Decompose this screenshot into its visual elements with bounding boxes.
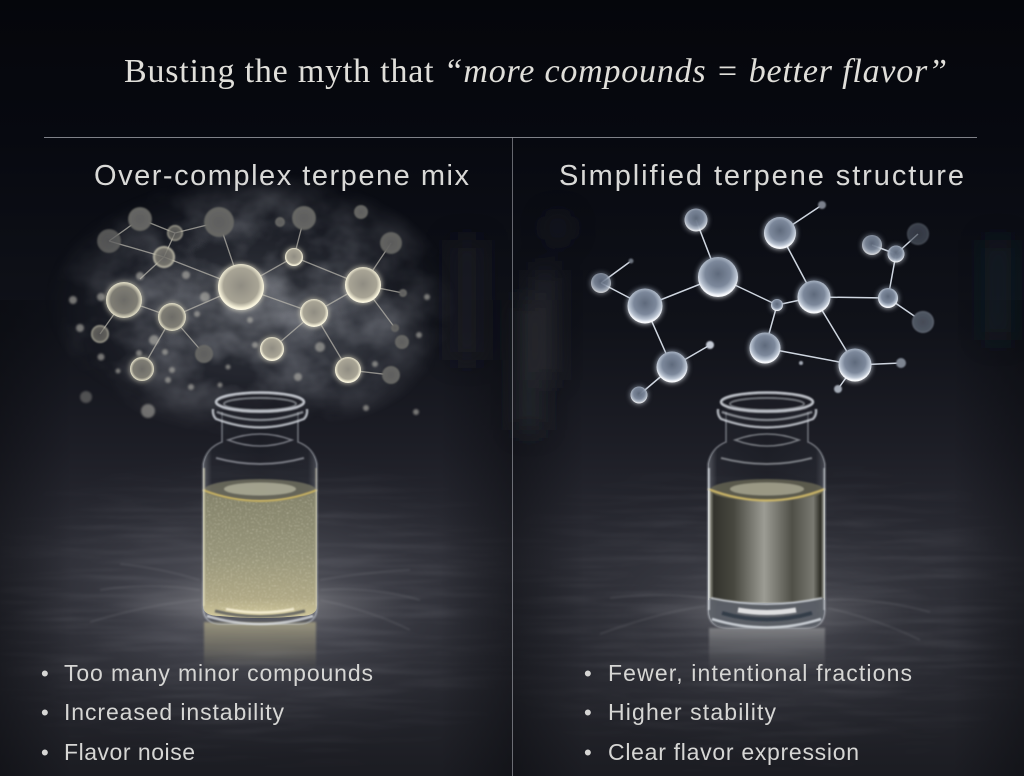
particles in liquid (206, 494, 314, 612)
panel: over-complex terpene mix (68, 180, 440, 422)
bullet: clear flavor expression: Clear flavor expression (608, 739, 859, 765)
liquid surface (708, 479, 825, 501)
bottle: clear liquid vial (708, 392, 825, 676)
glass highlights (708, 412, 825, 628)
bullet: increased instability: • (41, 700, 49, 725)
bullet: flavor noise: • (41, 740, 49, 765)
glass highlights (203, 412, 317, 624)
bullet: higher stability: Higher stability (608, 699, 776, 725)
heading: right panel: Simplified terpene structure (559, 160, 964, 192)
bullet: flavor noise: Flavor noise (64, 739, 195, 765)
bottle: cloudy liquid vial (203, 392, 317, 672)
liquid surface (203, 479, 317, 501)
bullet list: right panel (584, 660, 912, 765)
title: Busting the myth that “more compounds = better flavor” (124, 53, 947, 90)
glowing atoms (106, 248, 381, 383)
heading: left panel: Over-complex terpene mix (94, 160, 470, 192)
screw neck rim (213, 392, 307, 428)
liquid (203, 490, 317, 618)
bullet: too many minor compounds: • (41, 661, 49, 686)
bullet: fewer, intentional fractions: Fewer, intentional fractions (608, 660, 912, 686)
liquid (708, 490, 825, 604)
table reflection (709, 628, 825, 676)
smoke cloud (68, 180, 440, 422)
divider lines (44, 137, 977, 776)
table reflection (204, 622, 316, 672)
bullet list: left panel (41, 660, 373, 765)
bullet: increased instability: Increased instability (64, 699, 284, 725)
screw neck rim (718, 392, 816, 428)
molecule atoms (91, 205, 409, 384)
glass body (203, 412, 317, 624)
floating particles (69, 271, 430, 418)
background (0, 210, 1024, 776)
bullet: fewer, intentional fractions: • (584, 661, 592, 686)
glowing atoms (591, 208, 904, 404)
bullet: too many minor compounds: Too many minor compounds (64, 660, 373, 686)
panel: simplified terpene structure (591, 201, 934, 404)
dim atoms (628, 201, 934, 393)
bullet: clear flavor expression: • (584, 740, 592, 765)
bullet: higher stability: • (584, 700, 592, 725)
molecule bonds (100, 218, 403, 375)
glass base (709, 598, 824, 627)
molecule bonds (601, 205, 923, 395)
glass body (708, 412, 825, 628)
